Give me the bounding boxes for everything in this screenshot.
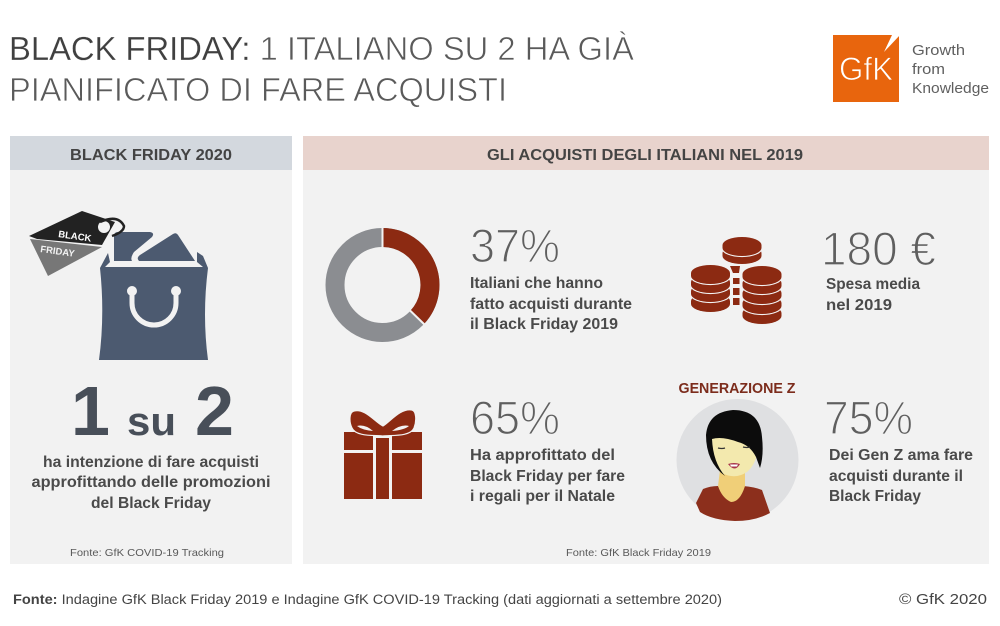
source note: Fonte: GfK COVID-19 Tracking [70,547,224,559]
stat: 37% [470,219,632,333]
statistic: 1 su 2 [71,372,234,450]
logo: GfK [833,35,989,102]
stat: 180 euro: 180 € [821,222,936,275]
stat: 75%: acquisti durante il [829,468,963,485]
title [9,30,634,108]
stat: 75%: Black Friday [829,488,921,505]
stat: 75% [824,391,973,505]
footer source: Fonte: Indagine GfK Black Friday 2019 e Indagine GfK COVID-19 Tracking (dati aggiornati a settembre 2020) [13,592,722,607]
heading: Black Friday 2020: BLACK FRIDAY 2020 [70,147,232,164]
icon: coins [691,237,782,324]
stat: 75%: Dei Gen Z ama fare [829,447,973,464]
statistic: 1 su 2: 2 [195,372,234,450]
panel: acquisti 2019 [303,136,989,564]
source note: Fonte: GfK Black Friday 2019 [566,547,711,559]
logo: GfK: Growth [912,43,965,59]
heading: acquisti 2019 [303,136,989,170]
logo: GfK: GfK [839,51,893,87]
stat: 37%: 37% [470,219,560,272]
text: intenzione di acquisto: ha intenzione di fare acquisti [43,454,259,471]
stat: 65%: Black Friday per fare [470,468,625,485]
panel: Black Friday 2020 [10,136,292,564]
stat: 180 euro: nel 2019 [826,297,892,314]
donut chart: 37% [335,226,430,332]
icon: shopping bag with tag [29,211,208,360]
stat: 180 euro: Spesa media [826,276,920,293]
logo: GfK: Knowledge [912,81,989,97]
icon: woman avatar [676,399,798,521]
title: BLACK FRIDAY: 1 ITALIANO SU 2 HA GIÀ [9,30,634,67]
stat: 37%: fatto acquisti durante [470,296,632,313]
icon: gift [344,410,422,499]
stat: 65%: 65% [470,391,560,444]
icon: shopping bag with tag: BLACK [58,229,92,245]
copyright: © GfK 2020 [899,592,987,608]
heading: Black Friday 2020 [10,136,292,170]
stat: 65% [470,391,625,505]
statistic: 1 su 2: 1 [71,372,110,450]
stat: 37%: Italiani che hanno [470,275,603,292]
logo: GfK: from [912,62,945,78]
title: PIANIFICATO DI FARE ACQUISTI [9,71,507,108]
statistic: 1 su 2: su [127,400,176,444]
stat: 65%: Ha approfittato del [470,447,615,464]
icon: shopping bag with tag: FRIDAY [40,244,76,260]
text: intenzione di acquisto: del Black Friday [91,495,211,512]
stat: 180 euro [821,222,936,314]
stat: 37%: il Black Friday 2019 [470,316,618,333]
stat: 65%: i regali per il Natale [470,488,615,505]
text: intenzione di acquisto: approfittando delle promozioni [32,474,270,491]
label: Generazione Z: GENERAZIONE Z [678,381,796,397]
stat: 75%: 75% [824,391,913,444]
heading: acquisti 2019: GLI ACQUISTI DEGLI ITALIANI NEL 2019 [487,147,803,164]
text: intenzione di acquisto [32,454,270,512]
